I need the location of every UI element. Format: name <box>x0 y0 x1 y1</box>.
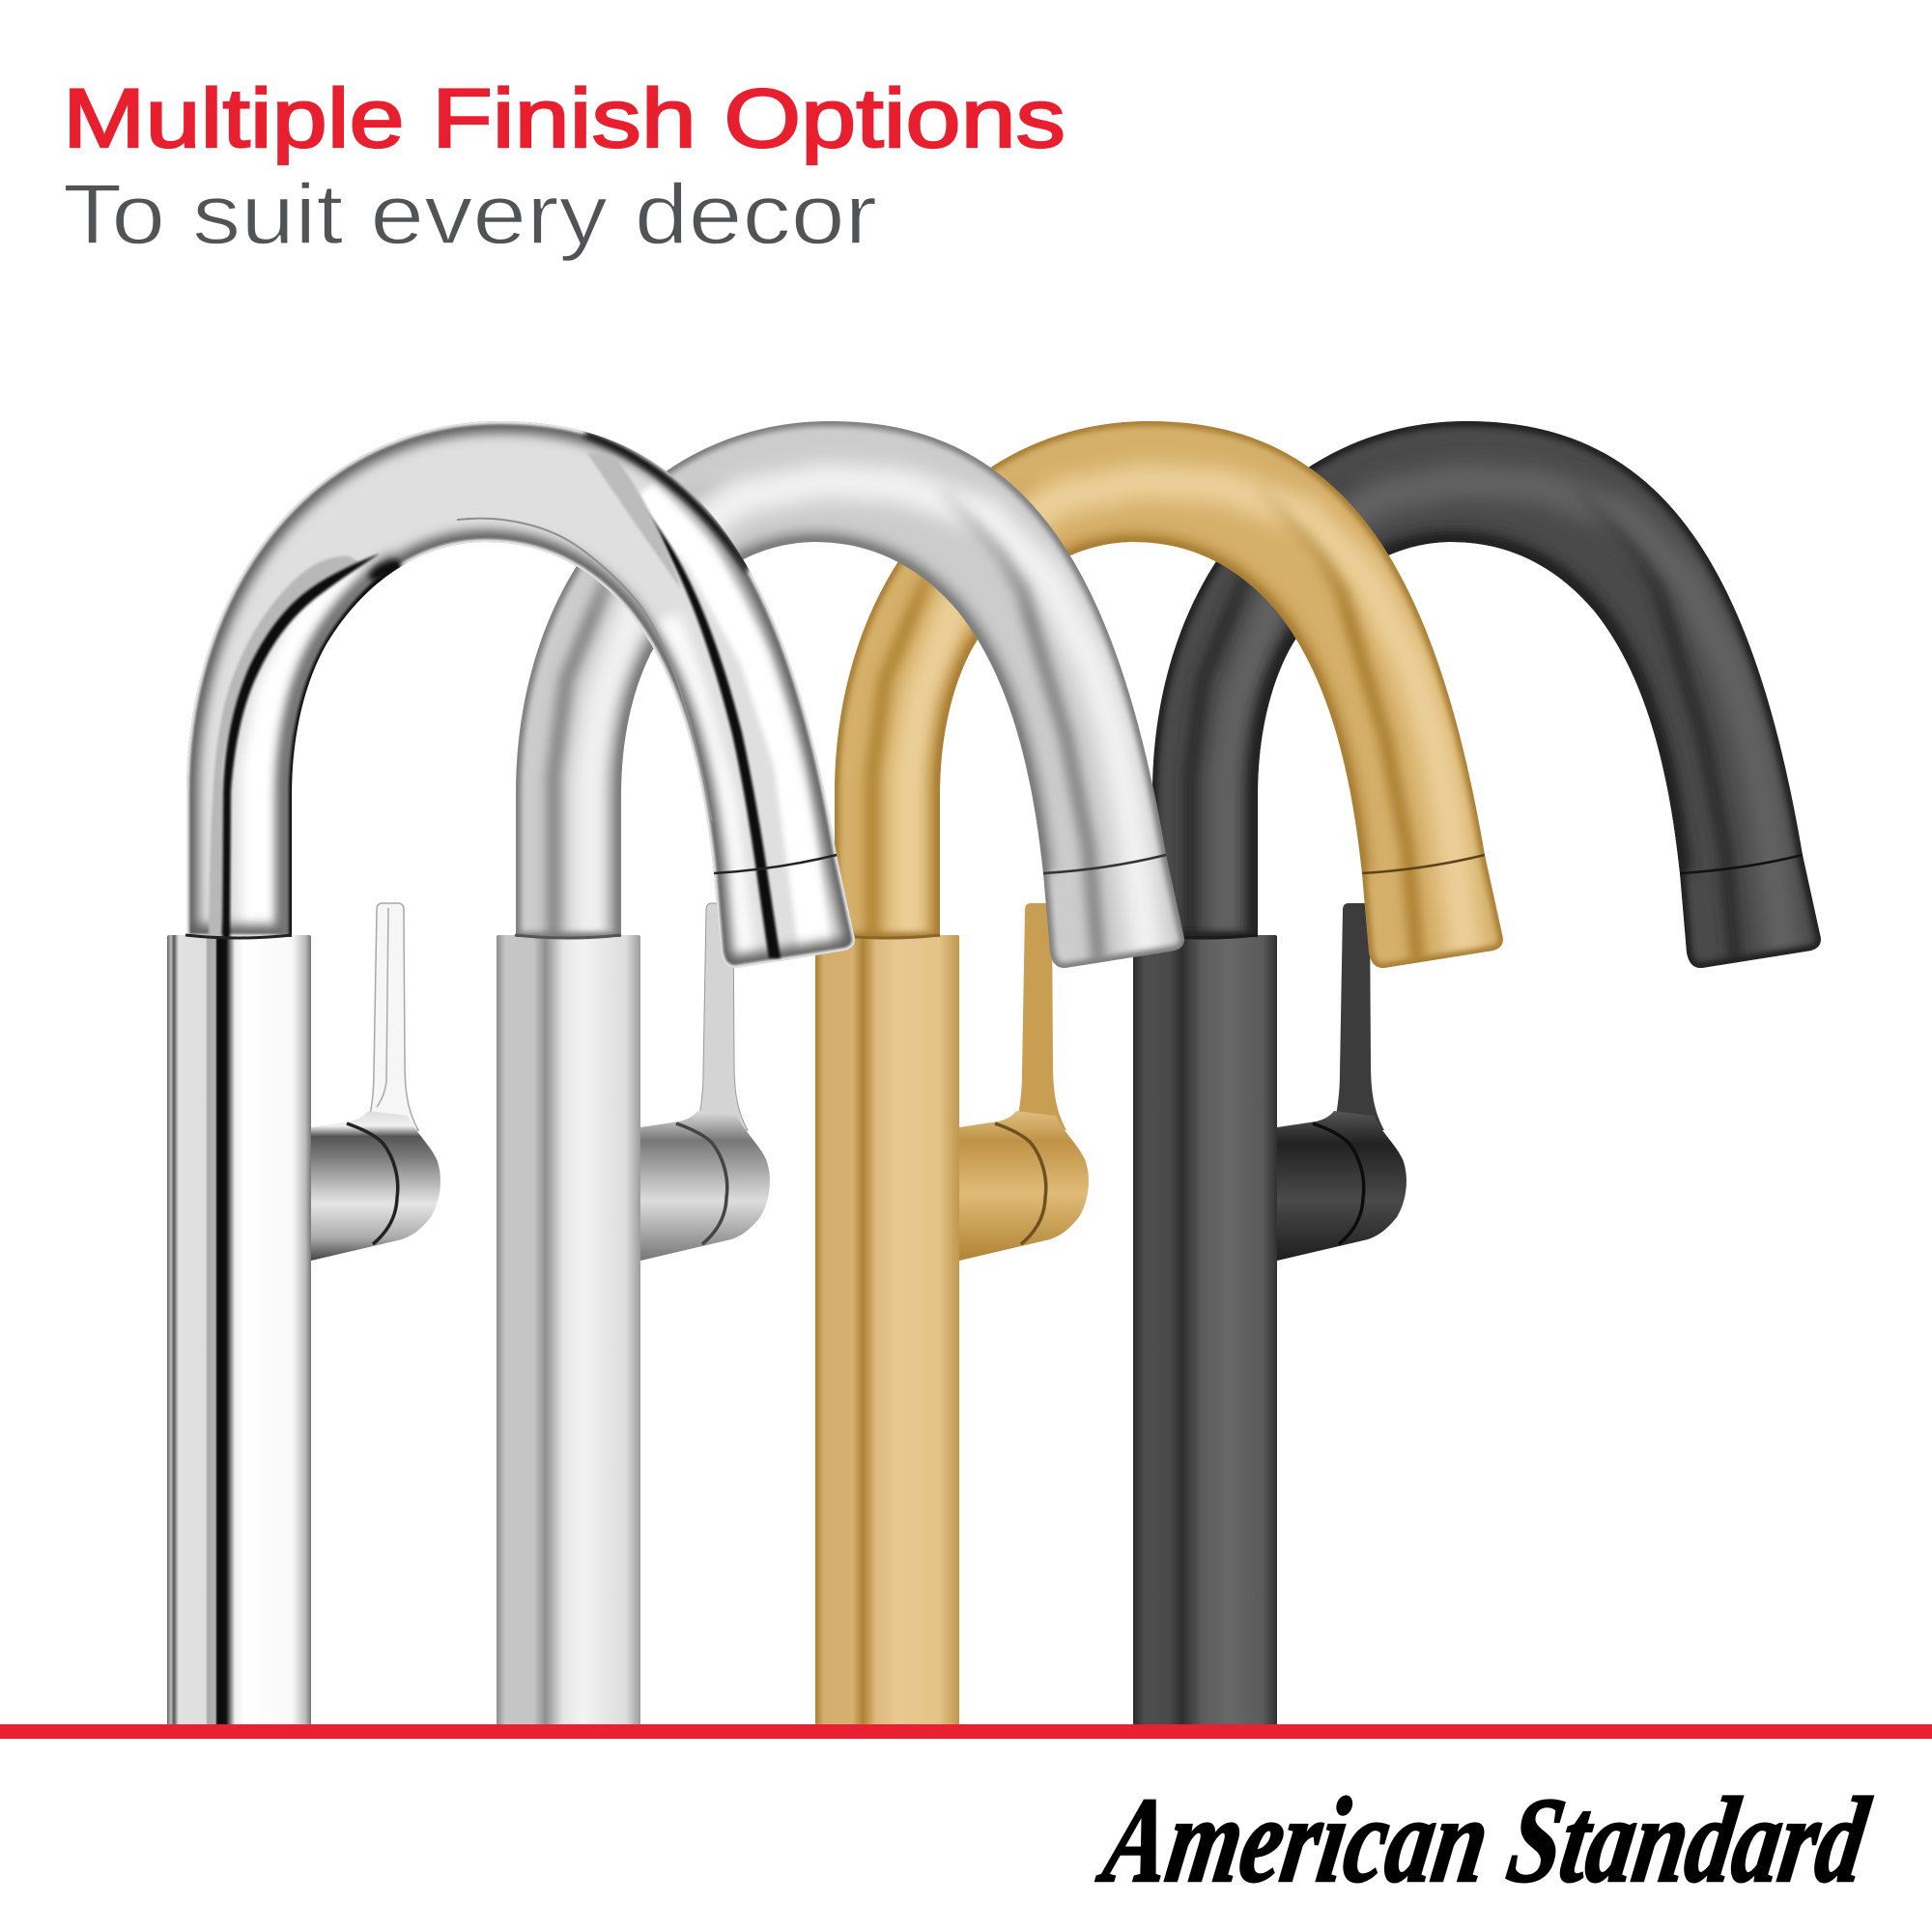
collar line <box>515 935 621 938</box>
handle: brushed nickel <box>640 903 770 1261</box>
faucet: matte black <box>1133 421 1821 1725</box>
faucet: brushed gold <box>815 421 1503 1725</box>
spout: brushed gold <box>835 421 1503 968</box>
spout: polished chrome <box>186 421 855 968</box>
collar line <box>185 935 292 938</box>
spout: brushed nickel <box>516 421 1184 968</box>
spout: matte black <box>1152 421 1821 968</box>
faucet: polished chrome <box>167 421 855 1725</box>
column: matte black <box>1133 935 1277 1725</box>
collar line <box>1151 935 1258 938</box>
handle: matte black <box>1277 903 1406 1261</box>
handle: polished chrome <box>311 903 440 1261</box>
collar line <box>834 935 940 938</box>
red baseline bar <box>0 1724 1932 1739</box>
handle: brushed gold <box>959 903 1089 1261</box>
subtitle: To suit every decor <box>63 166 877 262</box>
column: brushed nickel <box>497 935 640 1725</box>
title: Multiple Finish Options <box>63 72 1065 165</box>
faucet: brushed nickel <box>497 421 1184 1725</box>
column: brushed gold <box>815 935 959 1725</box>
column: polished chrome <box>167 935 311 1725</box>
